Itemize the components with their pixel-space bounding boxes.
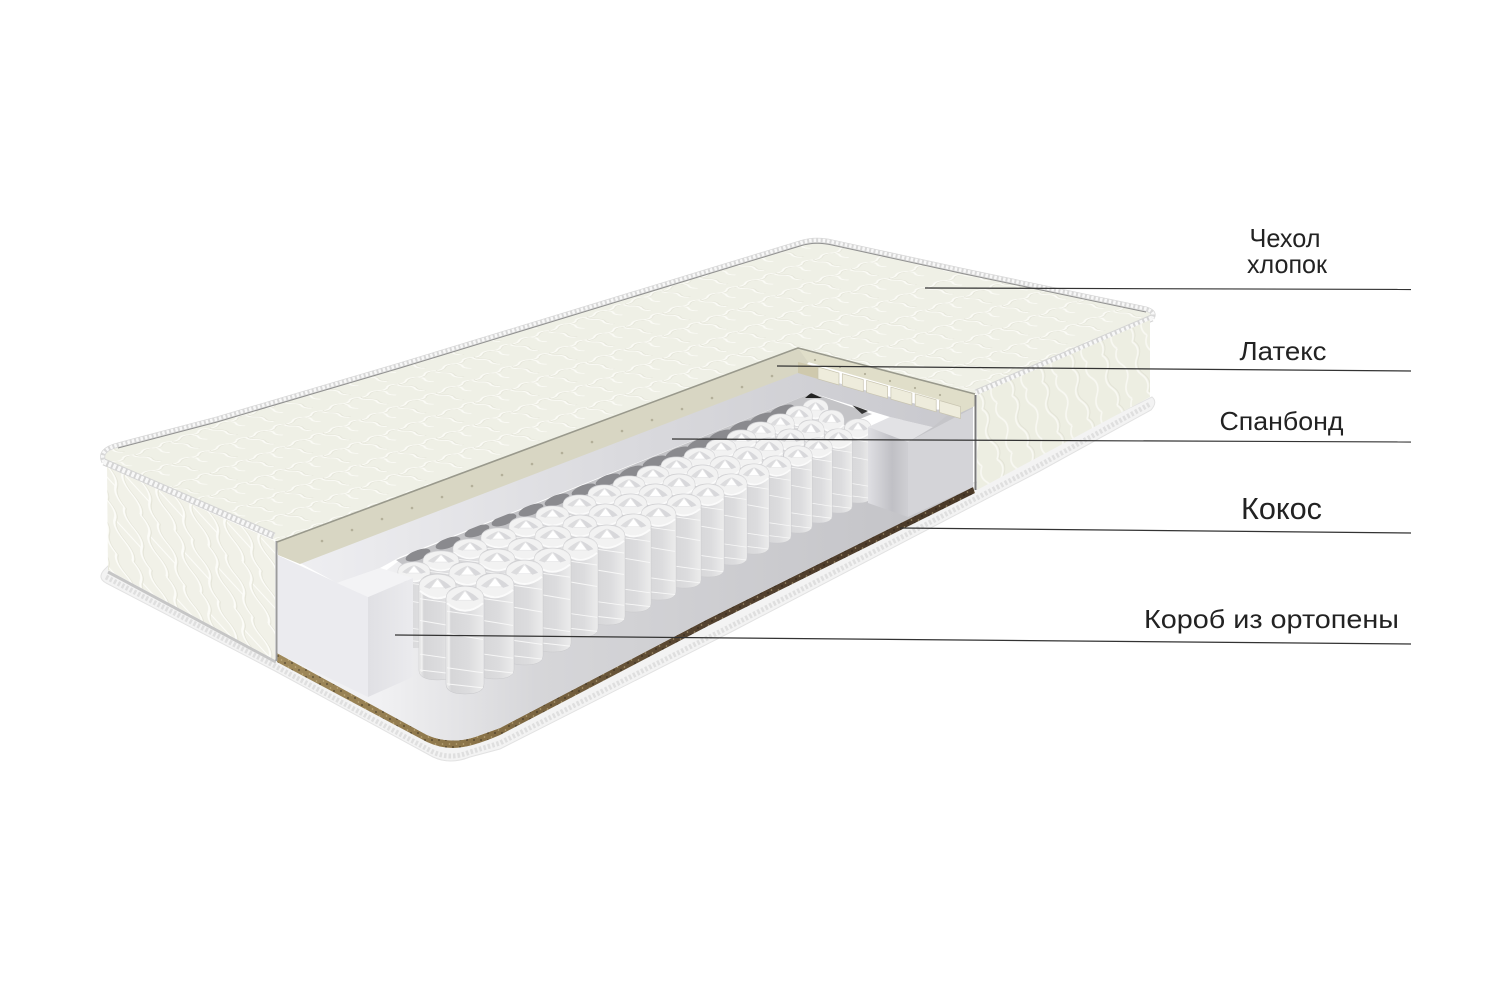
label: coconut: [900, 491, 1411, 533]
label: cover: хлопок: [1247, 249, 1328, 279]
label: cover: [925, 223, 1411, 290]
bottom piping and base: [101, 397, 1155, 761]
right side panel: [977, 320, 1150, 490]
label: spunbond: Спанбонд: [1220, 406, 1344, 436]
left side panel: [107, 467, 275, 660]
cut edges: [276, 348, 976, 661]
cavity floor: [277, 400, 973, 741]
label: coconut: Кокос: [1241, 491, 1322, 526]
label: orthopedic foam box: [395, 604, 1411, 644]
latex end strip top: [798, 348, 975, 413]
label: spunbond: [672, 406, 1411, 442]
label: latex: [777, 336, 1411, 371]
spring row 3: [398, 399, 828, 647]
coconut fibre layer: [277, 487, 975, 748]
latex end strip dots: [815, 360, 940, 395]
illustration: mattress cutaway: [101, 240, 1155, 761]
pocket springs: [398, 399, 871, 694]
latex block faces: [798, 362, 960, 418]
spunbond sheet: [300, 372, 950, 583]
label: orthopedic foam box: Короб из ортопены: [1144, 604, 1399, 634]
top cover: [103, 240, 1153, 541]
top piping front edges: [104, 318, 1152, 536]
spring row 2: [419, 410, 844, 680]
label: cover: Чехол: [1250, 223, 1320, 253]
top piping rear edges: [103, 240, 1153, 462]
spring row 1: [446, 419, 871, 694]
right foam block: [868, 408, 973, 517]
latex perforation dots: [322, 376, 772, 541]
gap behind springs: [396, 393, 872, 590]
latex long strip: [277, 348, 810, 564]
latex layer: [277, 348, 975, 564]
label: latex: Латекс: [1240, 336, 1326, 366]
left foam block: [277, 555, 413, 697]
